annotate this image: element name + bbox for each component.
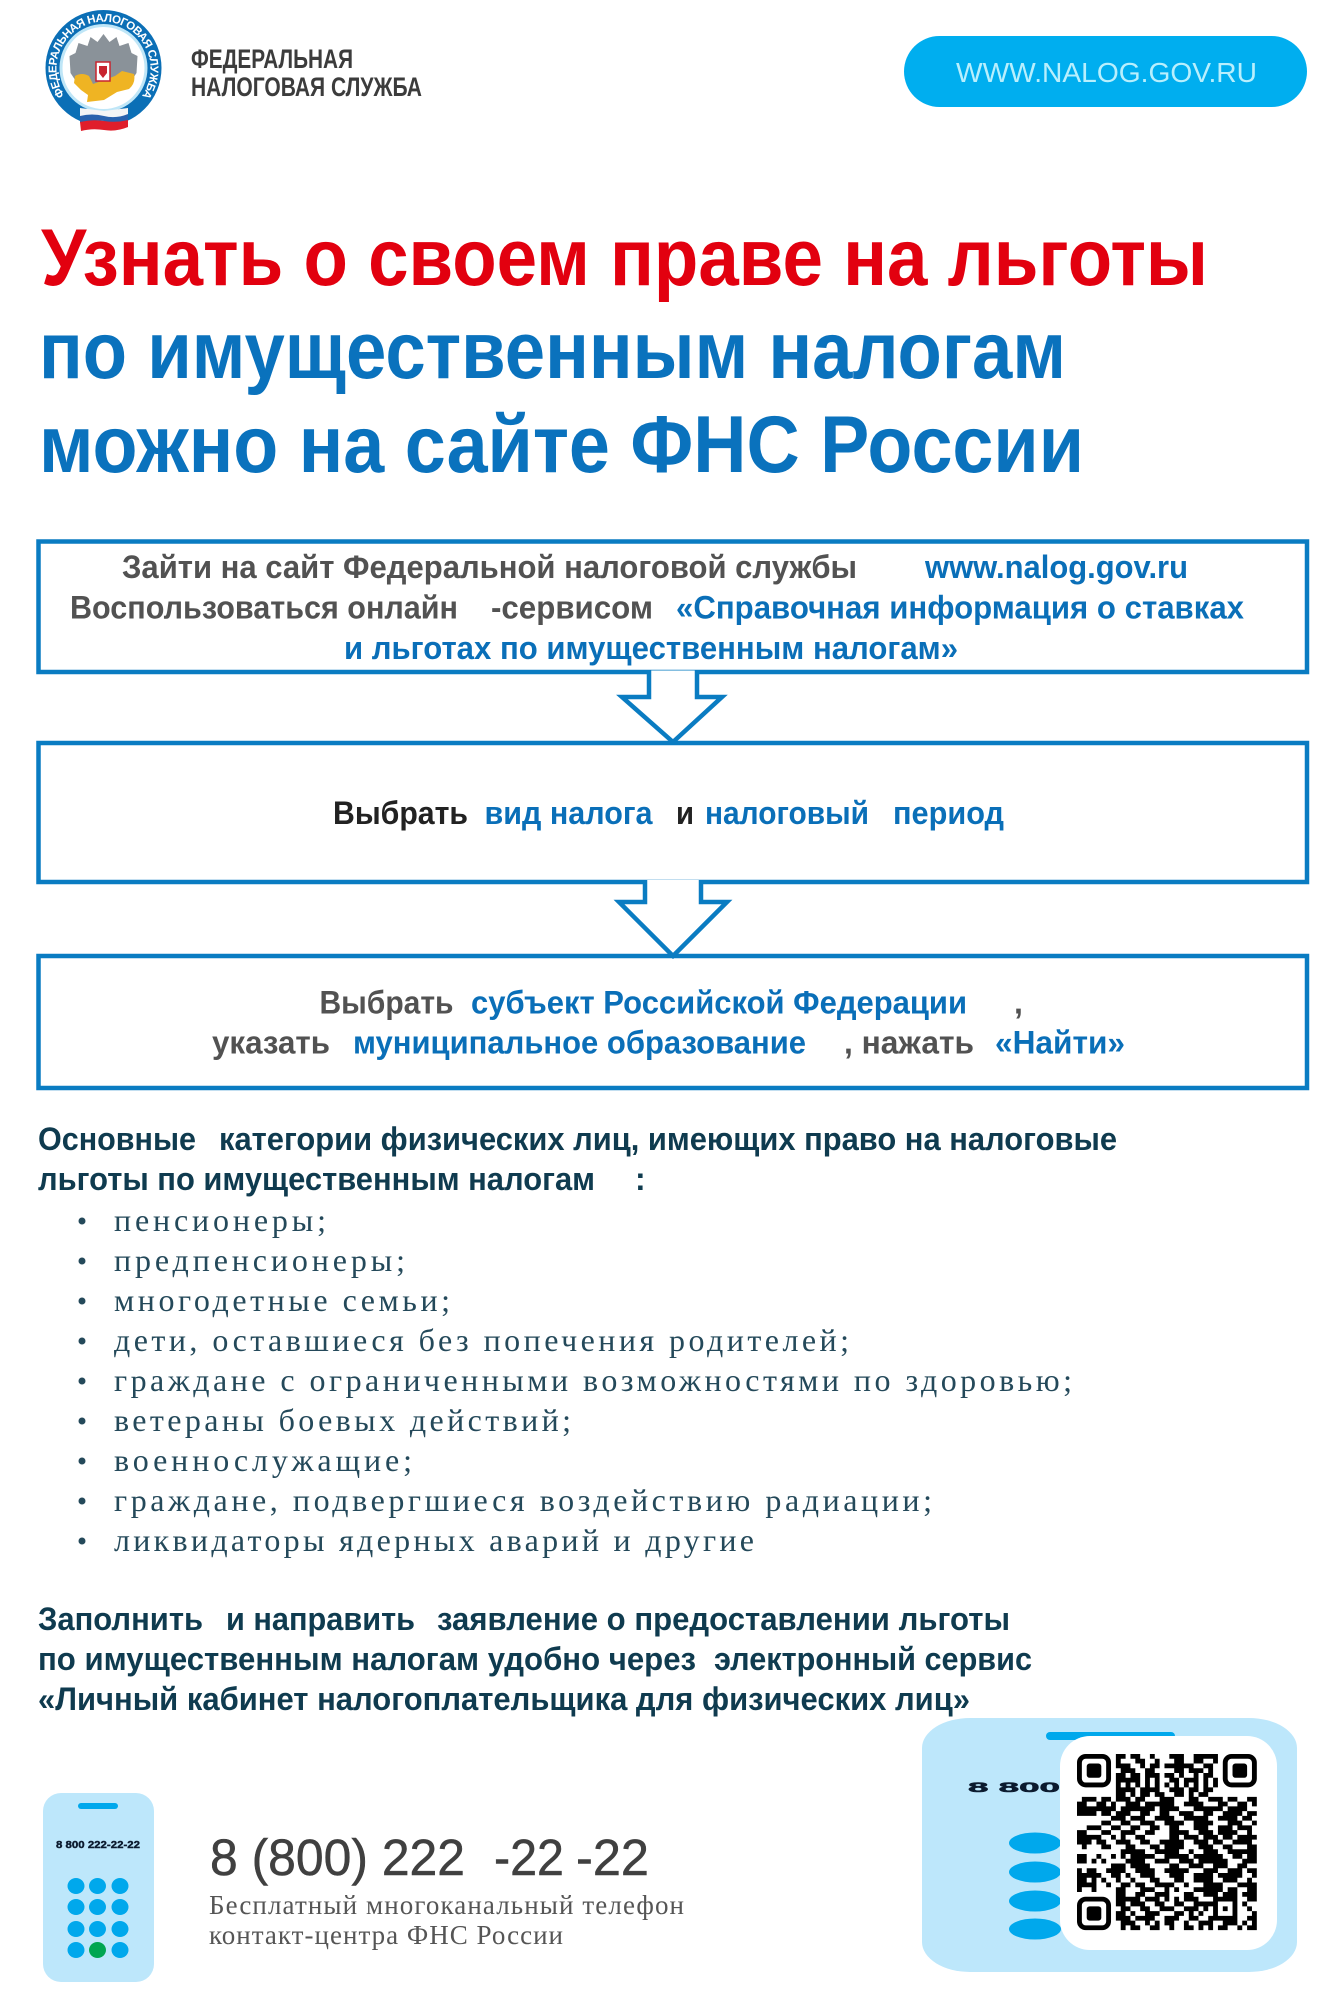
categories heading: льготы по имущественным налогам — [38, 1161, 595, 1197]
categories list: граждане с ограниченными возможностями по здоровью; — [114, 1362, 1072, 1398]
contact centre phone number — [210, 1829, 649, 1886]
icon: FNS emblem: ФЕДЕРАЛЬНАЯ НАЛОГОВАЯ СЛУЖБА — [48, 14, 158, 98]
contact centre phone number: -22 — [576, 1829, 649, 1886]
panel: step 1 visit site: «Справочная информация о ставках — [676, 590, 1244, 626]
application paragraph: «Личный кабинет налогоплательщика для физических лиц» — [38, 1681, 970, 1717]
application paragraph: Заполнить — [38, 1601, 203, 1637]
panel: step 3 choose region: указать — [212, 1024, 330, 1060]
panel: step 2 choose tax — [38, 743, 1307, 882]
panel: step 3 choose region: муниципальное образование — [353, 1024, 806, 1060]
website button — [904, 36, 1307, 107]
QR code — [1060, 1736, 1277, 1950]
panel: step 1 visit site: -сервисом — [491, 590, 653, 626]
panel: step 3 choose region: субъект Российской Федерации — [471, 984, 967, 1020]
header — [46, 10, 1307, 131]
panel: step 3 choose region: , нажать — [844, 1024, 974, 1060]
panel: step 1 visit site: Воспользоваться онлайн — [70, 590, 458, 626]
panel: step 3 choose region — [38, 956, 1307, 1088]
categories list: ликвидаторы ядерных аварий и другие — [114, 1522, 754, 1558]
categories heading: Основные — [38, 1121, 196, 1157]
title — [39, 213, 1208, 490]
panel: step 2 choose tax: Выбрать — [333, 795, 468, 831]
contact centre phone number: -22 — [494, 1829, 564, 1886]
panel: step 2 choose tax: и — [676, 795, 694, 831]
contact centre phone number: 8 (800) 222 — [210, 1829, 465, 1886]
categories list: дети, оставшиеся без попечения родителей; — [114, 1322, 849, 1358]
categories heading: категории физических лиц, имеющих право на налоговые — [219, 1121, 1117, 1157]
title: Узнать о своем праве на льготы — [41, 213, 1208, 303]
organisation name — [191, 44, 422, 102]
organisation name: НАЛОГОВАЯ СЛУЖБА — [191, 72, 422, 102]
arrow: step 2 to step 3 — [619, 880, 727, 956]
icon: small phone: 8 800 222-22-22 — [56, 1839, 140, 1851]
title: можно на сайте ФНС России — [39, 400, 1084, 490]
organisation name: ФЕДЕРАЛЬНАЯ — [191, 44, 353, 74]
panel: step 2 choose tax: налоговый — [705, 795, 869, 831]
categories heading: : — [635, 1161, 646, 1197]
panel: step 1 visit site — [38, 542, 1307, 672]
icon: small phone — [43, 1793, 154, 1982]
application paragraph: электронный сервис — [714, 1641, 1032, 1677]
panel: step 2 choose tax: период — [893, 795, 1004, 831]
categories heading — [38, 1121, 1117, 1197]
icon: large stretched phone: 8 800 — [968, 1779, 1061, 1795]
panel: step 3 choose region: , — [1014, 984, 1023, 1020]
categories list — [78, 1202, 1072, 1558]
title: по имущественным налогам — [39, 306, 1066, 396]
arrow: step 1 to step 2 — [622, 670, 722, 742]
categories list: предпенсионеры; — [114, 1242, 405, 1278]
panel: step 3 choose region: «Найти» — [995, 1024, 1125, 1060]
panel: step 1 visit site: www.nalog.gov.ru — [924, 549, 1188, 585]
categories list: граждане, подвергшиеся воздействию радиации; — [114, 1482, 932, 1518]
categories list: многодетные семьи; — [114, 1282, 450, 1318]
contact centre caption: Бесплатный многоканальный телефон — [209, 1890, 684, 1920]
website button: WWW.NALOG.GOV.RU — [956, 57, 1257, 88]
application paragraph: заявление о предоставлении льготы — [437, 1601, 1010, 1637]
contact centre caption — [209, 1890, 684, 1950]
panel: step 1 visit site: и льготах по имущественным налогам» — [344, 630, 958, 666]
panel: step 3 choose region: Выбрать — [320, 984, 454, 1020]
application paragraph: по имущественным налогам удобно через — [38, 1641, 696, 1677]
application paragraph — [38, 1601, 1032, 1717]
application paragraph: и направить — [226, 1601, 415, 1637]
contact centre caption: контакт-центра ФНС России — [209, 1920, 563, 1950]
categories list: ветераны боевых действий; — [114, 1402, 571, 1438]
categories list: военнослужащие; — [114, 1442, 412, 1478]
icon: large stretched phone — [922, 1718, 1297, 1972]
panel: step 1 visit site: Зайти на сайт Федеральной налоговой службы — [122, 549, 857, 585]
panel: step 2 choose tax: вид налога — [484, 795, 653, 831]
categories list: пенсионеры; — [114, 1202, 326, 1238]
